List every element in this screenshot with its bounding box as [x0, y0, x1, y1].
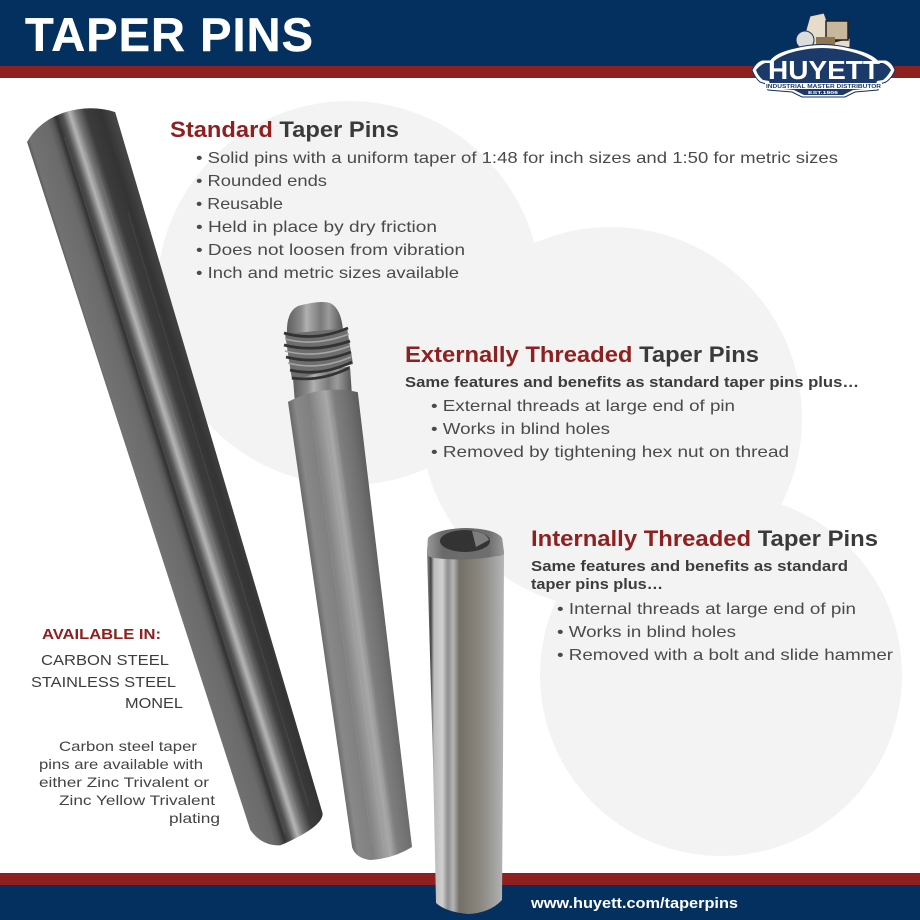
bullet list: • Works in blind holes — [557, 624, 736, 641]
materials heading: AVAILABLE IN: — [42, 626, 161, 643]
section: internally threaded taper pins — [531, 526, 894, 664]
bullet list: • Inch and metric sizes available — [196, 265, 459, 282]
threaded tip — [284, 302, 353, 404]
bullet list: • Held in place by dry friction — [196, 219, 437, 236]
logo: Huyett — [752, 13, 895, 97]
logo wordmark: HUYETT — [768, 55, 880, 85]
bullet list — [196, 150, 838, 282]
plating note: either Zinc Trivalent or — [39, 774, 209, 790]
logo badge — [752, 44, 895, 97]
logo tagline: INDUSTRIAL MASTER DISTRIBUTOR — [766, 84, 881, 90]
intro: taper pins plus… — [531, 576, 663, 593]
intro: Same features and benefits as standard — [531, 558, 848, 575]
bullet list: • External threads at large end of pin — [431, 398, 735, 415]
plating note: Carbon steel taper — [59, 738, 197, 754]
bullet list: • Internal threads at large end of pin — [557, 601, 856, 618]
bullet list: • Works in blind holes — [431, 421, 610, 438]
bullet list — [557, 601, 894, 664]
materials list — [31, 626, 183, 712]
materials: STAINLESS STEEL — [31, 674, 176, 691]
website url: www.huyett.com/taperpins — [530, 895, 738, 912]
bullet list: • Removed with a bolt and slide hammer — [557, 647, 894, 664]
logo est: EST.1906 — [808, 90, 839, 95]
materials: MONEL — [125, 695, 183, 712]
bullet list: • Rounded ends — [196, 173, 327, 190]
bullet list: • Solid pins with a uniform taper of 1:48 for inch sizes and 1:50 for metric sizes — [196, 150, 838, 167]
title: TAPER PINS — [25, 8, 313, 61]
plating note — [39, 738, 220, 826]
header band — [0, 0, 920, 78]
pin body — [287, 386, 423, 863]
heading: Standard Taper Pins — [170, 117, 399, 142]
pin: internally threaded taper pin — [427, 528, 504, 914]
plating note: pins are available with — [39, 756, 203, 772]
plating note: plating — [169, 810, 220, 826]
bullet list — [431, 398, 789, 461]
intro — [531, 558, 848, 593]
section: externally threaded taper pins — [405, 342, 859, 461]
section: standard taper pins — [170, 117, 838, 282]
logo figure — [796, 13, 850, 52]
footer band — [0, 873, 920, 920]
chamfer and bore — [427, 528, 504, 560]
bullet list: • Reusable — [196, 196, 283, 213]
plating note: Zinc Yellow Trivalent — [59, 792, 215, 808]
pin: externally threaded taper pin — [284, 302, 423, 863]
materials: CARBON STEEL — [41, 652, 169, 669]
pin: standard taper pin — [22, 98, 340, 854]
intro: Same features and benefits as standard taper pins plus… — [405, 374, 859, 391]
materials — [31, 652, 183, 712]
heading: Internally Threaded Taper Pins — [531, 526, 878, 551]
heading: Externally Threaded Taper Pins — [405, 342, 759, 367]
bullet list: • Removed by tightening hex nut on thread — [431, 444, 789, 461]
bullet list: • Does not loosen from vibration — [196, 242, 465, 259]
background circles — [157, 101, 902, 856]
